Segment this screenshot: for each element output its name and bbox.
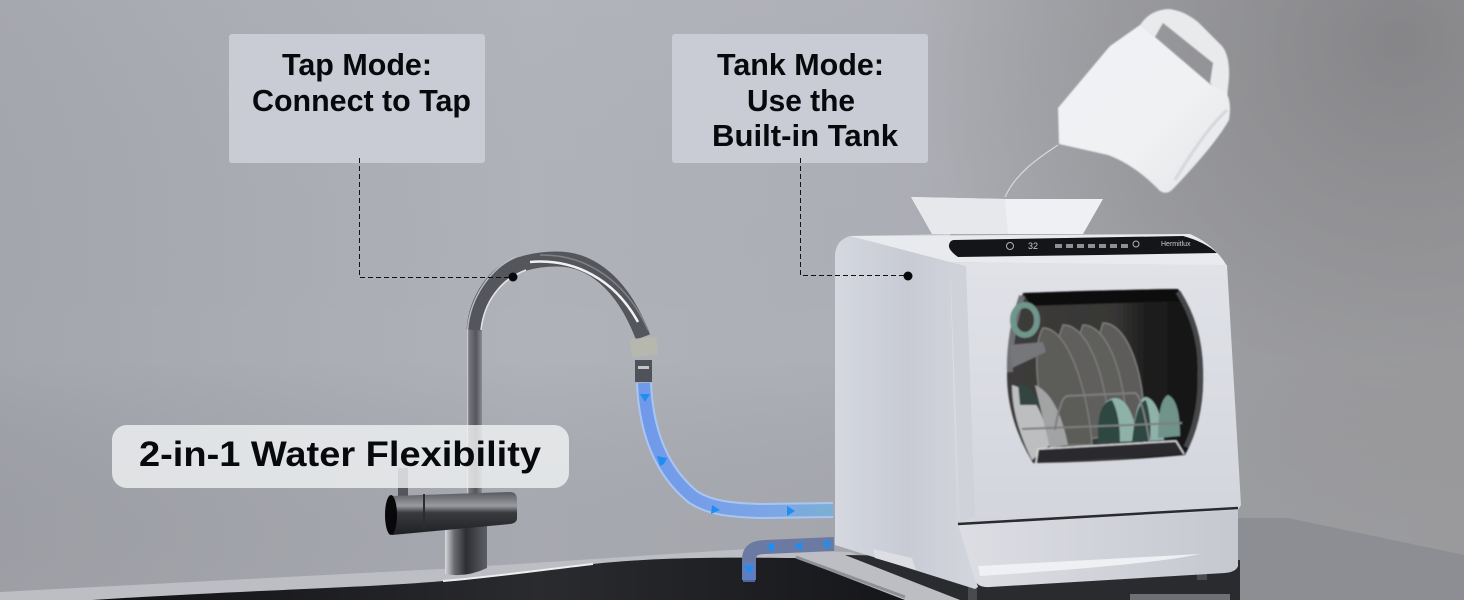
control panel: Hermitlux xyxy=(1161,241,1191,248)
faucet spout xyxy=(467,255,648,498)
counter top right xyxy=(900,518,1464,600)
shadow under dishwasher xyxy=(845,555,1240,600)
label: 2-in-1 water flexibility: 2-in-1 Water Flexibility xyxy=(139,435,542,474)
callout: tank mode: Tank Mode: xyxy=(717,47,884,82)
control panel xyxy=(949,236,1217,257)
faucet xyxy=(385,255,658,575)
icon: dishwasher feet xyxy=(968,570,1230,600)
control panel: 32 xyxy=(1028,241,1038,251)
bowls xyxy=(1098,395,1180,443)
water funnel xyxy=(911,197,1103,234)
callout: tap mode: Tap Mode: xyxy=(282,47,432,82)
sink and counter left xyxy=(0,549,970,600)
water pour stream xyxy=(1005,145,1058,197)
faucet side rod xyxy=(398,468,408,496)
callout: tank mode xyxy=(672,34,928,163)
dishwasher side xyxy=(835,234,978,589)
tank mode leader line xyxy=(800,158,912,280)
icon: water jug xyxy=(1058,9,1230,193)
dishwasher side vent xyxy=(873,549,916,570)
faucet base xyxy=(445,525,487,575)
dishwasher lower base xyxy=(958,508,1238,587)
leader line: tap mode xyxy=(360,158,518,282)
callout: tank mode: Use the xyxy=(747,83,855,118)
label: 2-in-1 water flexibility xyxy=(112,425,569,488)
faucet connector xyxy=(630,337,658,358)
callout: tap mode xyxy=(229,34,485,163)
faucet lever xyxy=(392,492,517,535)
dishwasher xyxy=(800,158,1241,589)
left plates and cup xyxy=(1010,305,1068,460)
water hose xyxy=(640,383,833,516)
dishwasher window xyxy=(1007,289,1203,463)
dishwasher top rim xyxy=(850,234,1227,266)
dishwasher door xyxy=(950,262,1241,525)
callout: drain hose xyxy=(744,539,834,582)
callout: tank mode: Built-in Tank xyxy=(712,118,899,153)
dish rack xyxy=(1022,393,1182,445)
plates xyxy=(1037,323,1144,445)
callout: tap mode: Connect to Tap xyxy=(252,83,471,118)
